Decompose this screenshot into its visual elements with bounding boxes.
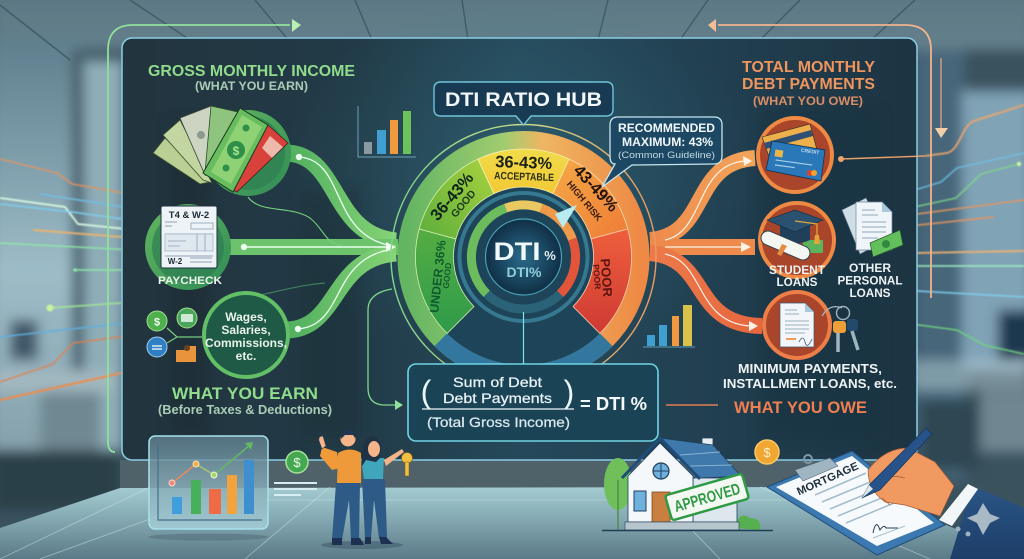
icon: student loans circle: [760, 203, 834, 289]
icon: gold coin: [755, 440, 779, 464]
icon: other personal loans: OTHER: [849, 263, 892, 275]
wedge: under 36 percent: UNDER 36%: [427, 240, 449, 314]
table surface: [0, 460, 1024, 559]
dial: DTI ratio gauge: [391, 124, 656, 390]
dial: dark core background: [416, 149, 632, 365]
dial: center readout: DTI%: [506, 264, 542, 280]
wedge: 36-43 percent good: 36-43%: [427, 169, 478, 224]
stamp: approved: [665, 473, 749, 521]
wedge: 36-43 percent good: GOOD: [449, 188, 479, 220]
circle: wages and salaries: Commissions,: [205, 336, 287, 350]
formula box: = DTI %: [580, 393, 647, 414]
icon: other personal loans: LOANS: [850, 288, 891, 300]
wedge: poor: [573, 229, 632, 333]
heading: gross monthly income: GROSS MONTHLY INCOME: [148, 63, 355, 80]
gold key: [402, 452, 412, 476]
title badge: DTI ratio hub: DTI RATIO HUB: [445, 89, 602, 111]
callout: recommended maximum: [602, 117, 722, 187]
icon: other personal loans: [838, 198, 903, 300]
formula box: Sum of Debt: [453, 374, 542, 390]
wedge: 36-43 percent acceptable: [478, 149, 569, 194]
connector: orange line to what you owe: [666, 404, 718, 406]
wedge: 36-43 percent acceptable: ACCEPTABLE: [494, 170, 554, 184]
wedge: under 36 percent: GOOD: [441, 262, 453, 289]
icon: dollar coin with text lines: [274, 451, 317, 495]
label: what you earn: (Before Taxes & Deductions): [158, 403, 332, 417]
mini bar chart: upper left: [358, 106, 416, 157]
heading: total monthly debt payments: (WHAT YOU OWE): [753, 94, 863, 108]
wedge: poor: POOR: [598, 258, 615, 298]
illustration: mortgage clipboard: MORTGAGE: [795, 460, 860, 498]
label: what you earn: [158, 384, 332, 417]
heading: total monthly debt payments: TOTAL MONTHLY: [742, 59, 876, 76]
heading: total monthly debt payments: DEBT PAYMENTS: [742, 76, 875, 93]
text: minimum payments: MINIMUM PAYMENTS,: [738, 361, 882, 376]
icon: other personal loans: PERSONAL: [838, 276, 902, 288]
mini bar chart: lower right: [643, 305, 695, 347]
small income source icons: [147, 308, 202, 362]
icon: paycheck circle with T4 and W-2 form: T4 & W-2: [169, 210, 209, 221]
formula box: ): [564, 374, 574, 410]
dial: needle: [555, 205, 577, 228]
icon: installment document circle: [764, 292, 830, 358]
dial: stem to formula: [522, 312, 524, 364]
icon: gold coin: $: [763, 445, 771, 460]
circle: wages and salaries: Wages,: [225, 310, 267, 324]
text: minimum payments: INSTALLMENT LOANS, etc.: [723, 376, 897, 391]
icon: paycheck circle with T4 and W-2 form: [145, 204, 231, 290]
heading: gross monthly income: (WHAT YOU EARN): [195, 81, 308, 93]
illustration: couple with key: [319, 430, 412, 549]
illustration: hand signing with pen: [862, 428, 1024, 559]
small income source icons: $: [154, 316, 160, 328]
wedge: 43-49 percent high risk: 43-49%: [570, 162, 622, 216]
background data lines: left: [0, 159, 135, 400]
icon: student loans circle: STUDENT: [769, 265, 825, 277]
dial: inner rings: [460, 193, 588, 321]
circle: wages and salaries: Salaries,: [221, 323, 271, 337]
icon: credit card circle: CREDIT: [800, 148, 820, 156]
circle: wages and salaries: etc.: [236, 349, 256, 363]
callout: recommended maximum: (Common Guideline): [618, 150, 715, 161]
icon: paycheck circle with T4 and W-2 form: W-2: [168, 257, 183, 266]
dial: center readout: [486, 219, 562, 295]
formula connector: green arrow: [368, 289, 403, 410]
income flow ribbons: [225, 153, 398, 332]
orange frame with arrows: [708, 19, 948, 298]
connector: credit card to background line: [838, 156, 925, 162]
debt flow ribbons: [650, 156, 762, 331]
wedge: under 36 percent: [415, 229, 474, 333]
wedge: poor: POOR: [591, 264, 603, 290]
icon: money circle and banknotes: $: [233, 144, 240, 158]
green frame with arrow: [108, 19, 301, 452]
illustration: approved house: [602, 438, 773, 530]
heading: gross monthly income: [148, 63, 355, 93]
background data lines: right: [881, 105, 1024, 354]
dial: center readout: %: [544, 248, 556, 263]
woman: [361, 436, 404, 544]
icon: keys: [822, 306, 858, 352]
formula box: (: [421, 374, 432, 410]
label: what you earn: WHAT YOU EARN: [172, 384, 318, 403]
man: [319, 430, 364, 545]
callout: recommended maximum: RECOMMENDED: [618, 123, 715, 135]
chart card: growth bars: [148, 436, 268, 540]
icon: money circle and banknotes: [153, 106, 291, 196]
icon: dollar coin with text lines: $: [293, 455, 301, 470]
callout: recommended maximum: MAXIMUM: 43%: [622, 137, 713, 149]
title badge: DTI ratio hub: [434, 82, 613, 125]
wedge: 36-43 percent acceptable: 36-43%: [495, 153, 553, 173]
dial: center readout: DTI: [494, 238, 540, 266]
stamp: approved: APPROVED: [672, 481, 742, 516]
formula box: Debt Payments: [443, 390, 552, 406]
formula box: [408, 364, 658, 441]
wedge: 43-49 percent high risk: HIGH RISK: [564, 179, 604, 224]
illustration: mortgage clipboard: [767, 451, 945, 555]
main panel: [122, 0, 917, 460]
text: minimum payments: [723, 361, 897, 391]
icon: student loans circle: LOANS: [776, 277, 818, 289]
heading: total monthly debt payments: [742, 59, 876, 108]
label: what you owe: WHAT YOU OWE: [734, 398, 867, 417]
dial: outer ring band: [391, 124, 656, 390]
wedge: 36-43 percent good: [419, 159, 494, 239]
circle: wages and salaries: [204, 293, 288, 377]
icon: credit card circle: [758, 118, 832, 192]
formula box: (Total Gross Income): [427, 414, 570, 430]
icon: paycheck circle with T4 and W-2 form: PAYCHECK: [158, 275, 222, 287]
wedge: 43-49 percent high risk: [553, 159, 628, 239]
